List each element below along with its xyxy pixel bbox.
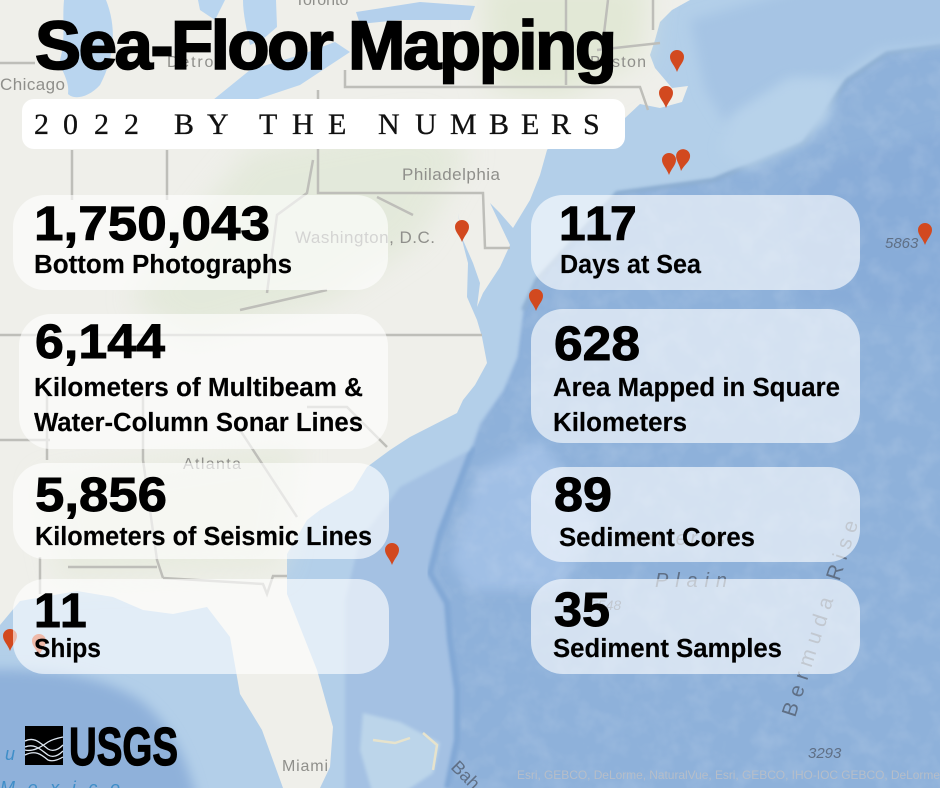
stat card: bottom photographs: Bottom Photographs xyxy=(34,251,292,279)
map labels: Esri, GEBCO, DeLorme, NaturalVue, Esri, GEBCO, IHO-IOC GEBCO, DeLorme xyxy=(517,768,940,782)
stat card: multibeam and sonar lines: 6,144 xyxy=(35,316,165,369)
map labels: Hatteras xyxy=(625,528,725,550)
land xyxy=(0,0,690,788)
lake huron xyxy=(243,0,277,45)
gulf of maine xyxy=(690,0,940,122)
shelf xyxy=(270,0,940,788)
subtitle banner: 2022 BY THE NUMBERS xyxy=(34,108,600,141)
gulf of mexico xyxy=(0,590,300,788)
stat card: area mapped: Kilometers xyxy=(553,409,687,437)
subtitle banner xyxy=(22,99,625,149)
map labels: Chicago xyxy=(0,75,65,94)
stat card: sediment cores: Sediment Cores xyxy=(559,524,755,552)
southern vegetation xyxy=(40,440,300,580)
map labels: Washington, D.C. xyxy=(295,228,435,247)
stat card: multibeam and sonar lines: Water-Column Sonar Lines xyxy=(34,409,363,437)
lake erie xyxy=(213,42,350,100)
map labels: u xyxy=(5,744,15,764)
map labels: Atlanta xyxy=(183,456,241,473)
icon: USGS waves xyxy=(25,726,63,765)
map labels: Boston xyxy=(590,54,646,71)
wordmark: USGS xyxy=(69,717,178,777)
stat card: seismic lines: Kilometers of Seismic Lines xyxy=(35,523,372,551)
stat card: area mapped xyxy=(531,309,860,443)
stat card: sediment samples: Sediment Samples xyxy=(553,635,782,663)
outer ridge xyxy=(450,440,600,590)
title: Sea-Floor Mapping xyxy=(35,7,617,84)
appalachian vegetation xyxy=(130,120,470,340)
abyssal darker zone xyxy=(790,127,940,320)
map labels: Detroit xyxy=(167,54,226,71)
scarp band xyxy=(430,447,473,788)
stat card: ships: Ships xyxy=(34,635,101,663)
blake plateau xyxy=(330,270,545,788)
USGS logo xyxy=(25,717,178,777)
stat card: bottom photographs: 1,750,043 xyxy=(34,198,270,251)
deep gulf basin xyxy=(0,670,197,788)
stat card: sediment samples: 35 xyxy=(554,584,610,637)
stat card: seismic lines xyxy=(13,463,389,559)
map labels: Philadelphia xyxy=(402,165,501,184)
location pins xyxy=(3,50,932,656)
stat card: ships: 11 xyxy=(34,585,87,638)
stat card: bottom photographs xyxy=(13,195,388,290)
stat card: days at sea: Days at Sea xyxy=(560,251,702,279)
stat card: seismic lines: 5,856 xyxy=(35,469,167,522)
stat card: multibeam and sonar lines: Kilometers of Multibeam & xyxy=(34,374,363,402)
bahamas islands xyxy=(373,733,437,770)
lake ontario xyxy=(356,2,475,24)
lake michigan xyxy=(60,0,113,97)
stat card: days at sea xyxy=(531,195,860,290)
map labels: Miami xyxy=(282,758,328,775)
map labels: 5548 xyxy=(590,597,621,613)
shelf edge xyxy=(523,43,940,310)
seafloor relief texture xyxy=(454,54,940,788)
georges bank xyxy=(720,80,835,170)
stat card: ships xyxy=(13,579,389,674)
stat card: multibeam and sonar lines xyxy=(19,314,388,449)
stat card: sediment cores: 89 xyxy=(554,469,612,522)
bahamas banks xyxy=(360,713,440,788)
stat card: area mapped: Area Mapped in Square xyxy=(553,374,840,402)
map labels: Plain xyxy=(655,570,727,592)
stat card: sediment samples xyxy=(531,579,860,674)
map labels: 3293 xyxy=(808,745,842,762)
stat card: days at sea: 117 xyxy=(559,198,637,251)
state borders xyxy=(0,0,660,594)
new england vegetation xyxy=(480,0,650,100)
lake superior corner xyxy=(198,0,225,20)
stat card: area mapped: 628 xyxy=(554,318,640,371)
stat card: sediment cores xyxy=(531,467,860,562)
map labels: Bermuda Rise xyxy=(778,517,863,720)
map labels: 5863 xyxy=(885,235,919,252)
